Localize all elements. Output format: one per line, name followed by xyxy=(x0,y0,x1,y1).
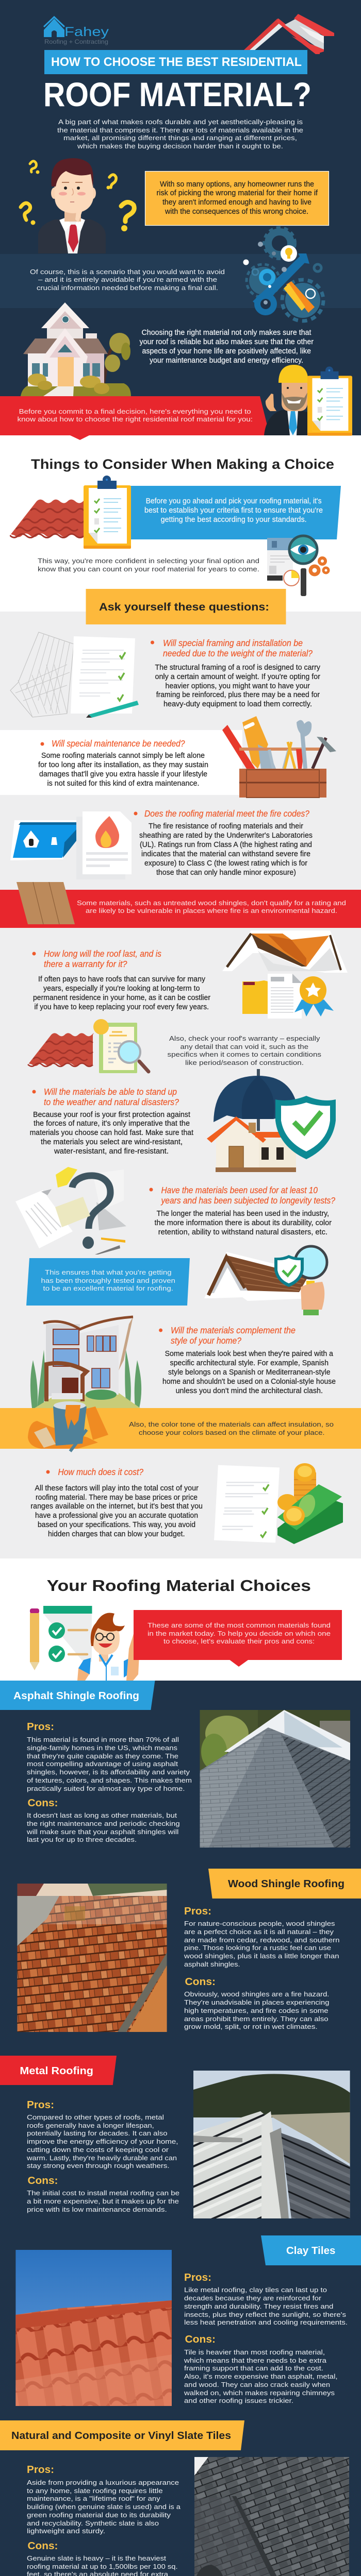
cons text: roofing material at up to 1,500lbs per 100 sq. xyxy=(27,2563,178,2570)
text: confidence xyxy=(38,557,259,573)
logo tagline: Roofing + Contracting xyxy=(44,38,108,45)
panel: establish criteria: best to establish your criteria first to ensure that you're xyxy=(144,506,323,515)
cons text: Tile is heavier than most roofing material, xyxy=(184,2348,325,2356)
icon: roof inspection xyxy=(204,1246,327,1315)
question: roof lifespan: permanent residence in your home, as it can be costlier xyxy=(33,993,210,1002)
pros text: pine. Those looking for a rustic feel can use xyxy=(184,1944,331,1952)
cons text: last you for up to three decades. xyxy=(27,1836,137,1843)
cons text: Also, it's more expensive than asphalt, metal, xyxy=(184,2372,337,2380)
band: color tone note xyxy=(0,1408,361,1449)
question: roof lifespan: If often pays to have roofs that can survive for many xyxy=(38,975,205,984)
cons heading: Cons: xyxy=(185,2334,216,2345)
photo: slate roof xyxy=(194,2457,349,2576)
title: ROOF MATERIAL? xyxy=(43,75,311,113)
pros text: Aside from providing a luxurious appearance xyxy=(27,2479,179,2486)
illustration: gears and tools xyxy=(243,228,323,321)
banner: title line one xyxy=(44,50,307,74)
illustration: confused man xyxy=(38,158,106,253)
pros text: Like metal roofing, clay tiles can last up to xyxy=(184,2286,327,2294)
callout: tested and proven xyxy=(26,1258,190,1306)
icon: folder and award ribbon xyxy=(242,974,334,1019)
pros text xyxy=(27,1736,192,1792)
question: fire codes xyxy=(134,808,313,877)
panel: wood shingle roofing xyxy=(18,1869,361,2032)
band: wood shingle warning: are likely to be vulnerable in places where fire is an environmental hazard. xyxy=(86,907,337,914)
tab: slate heading xyxy=(0,2420,244,2450)
question: home style xyxy=(159,1325,336,1395)
pros text xyxy=(184,1920,339,1968)
cons text: They're unadvisable in places experiencing xyxy=(184,1998,329,2006)
banner: before you commit xyxy=(0,396,270,440)
pros text: single-family homes in the US, which means xyxy=(27,1744,178,1752)
pros text xyxy=(27,2479,181,2535)
icon: document with checks xyxy=(214,1465,280,1543)
pros heading: Pros: xyxy=(27,2464,54,2476)
cons text: It doesn't last as long as other materials, but xyxy=(27,1811,177,1819)
text: avoidable scenario xyxy=(30,268,225,292)
pros text xyxy=(184,2286,348,2326)
banner: before you commit: know about how to choose the right residential roof material for you: xyxy=(18,415,253,423)
question: cost: based on your specifications. This way, you avoid xyxy=(38,1520,195,1529)
icon: paint bucket and roller xyxy=(28,1401,108,1451)
question: special framing: framing be reinforced, plus there may be a need for xyxy=(156,690,320,699)
pros text: asphalt shingles. xyxy=(184,1960,240,1968)
pros text: lightweight and sturdy. xyxy=(27,2527,105,2535)
text: warranty note: any detail that can void it, such as the xyxy=(180,1043,308,1050)
cons text xyxy=(26,1811,180,1843)
intro text: A big part of what makes roofs durable and yet aesthetically-pleasing is xyxy=(58,118,303,126)
question: special framing: only a certain amount of weight. If you're opting for xyxy=(155,672,320,681)
text: avoidable scenario: – and it is entirely avoidable if you're armed with the xyxy=(38,276,217,283)
question: home style: home and shouldn't be used on a Colonial-style house xyxy=(162,1377,336,1386)
icon: red roof tiles xyxy=(10,500,85,538)
callout: common materials xyxy=(134,1610,342,1667)
callout: options: with the consequences of this wrong choice. xyxy=(165,207,308,216)
pros heading: Pros: xyxy=(184,1906,211,1917)
text: avoidable scenario: Of course, this is a scenario that you would want to avoid xyxy=(30,268,225,276)
background: grey questions section xyxy=(0,612,361,1558)
callout: tested and proven: to be an excellent material for roofing. xyxy=(43,1284,173,1292)
cons text: price with its low maintenance demands. xyxy=(27,2206,167,2213)
question: longevity tests: years and has been subjected to longevity tests? xyxy=(161,1195,335,1206)
question: special framing: needed due to the weight of the material? xyxy=(163,648,313,658)
tab: metal heading: Metal Roofing xyxy=(20,2065,93,2077)
question: special framing: The structural framing of a roof is designed to carry xyxy=(155,663,320,672)
question: cost: hidden charges that can blow your budget. xyxy=(48,1530,185,1538)
question: cost xyxy=(30,1467,203,1538)
pros text: decades because they are reinforced for xyxy=(184,2294,322,2302)
text: choosing the right material: Choosing the right material not only makes sure that xyxy=(141,328,311,337)
illustration: house xyxy=(21,302,131,396)
icon: blue roof xyxy=(10,820,77,860)
logo chevron xyxy=(44,17,64,27)
pros text: are a perfect choice as it is all natural – they xyxy=(184,1928,334,1936)
pros text: stay strong even through rough weathers. xyxy=(27,2162,170,2170)
pros text: cutting down the costs of keeping cool or xyxy=(27,2146,169,2154)
question: special framing: Will special framing and installation be xyxy=(163,638,303,648)
icon: money and coins xyxy=(277,1463,343,1544)
photo: metal roof xyxy=(193,2071,350,2218)
text: choosing the right material: your roof is reliable but also makes sure that the other xyxy=(139,337,314,346)
panel: establish criteria: getting the best according to your standards. xyxy=(161,515,307,524)
intro text: which makes the buying decision harder than it ought to be. xyxy=(77,142,283,150)
cons text: The initial cost to install metal roofing can be xyxy=(27,2189,179,2197)
tab: clay heading xyxy=(261,2235,361,2265)
cons heading: Cons: xyxy=(28,2540,58,2552)
question: home style: unless you don't mind the architectural clash. xyxy=(176,1386,323,1395)
question: roof lifespan: How long will the roof last, and is xyxy=(44,948,161,959)
icon: logo house xyxy=(44,19,64,37)
text: avoidable scenario: crucial information needed before making a final call. xyxy=(37,284,218,292)
question: home style: style belongs on a Spanish or Mediterranean-style xyxy=(168,1368,331,1377)
cons text xyxy=(27,2189,179,2213)
panel: maintenance: Some roofing materials cannot simply be left alone xyxy=(41,751,205,760)
cons text: walked on, which makes repairing chimneys xyxy=(184,2389,335,2397)
icon: magnifier with eye xyxy=(267,536,329,596)
callout: tested and proven: This ensures that what you're getting xyxy=(45,1268,172,1276)
question: cost: How much does it cost? xyxy=(58,1467,143,1477)
cons text: a bit more expensive, but it makes up for the xyxy=(27,2197,179,2205)
pros text xyxy=(26,2113,178,2170)
panel: maintenance: damages that'll give you extra hassle if your lifestyle xyxy=(39,770,207,778)
tab: slate heading: Natural and Composite or Vinyl Slate Tiles xyxy=(11,2430,231,2442)
panel: metal roofing xyxy=(0,2056,350,2218)
panel: maintenance: for too long after its installation, as they may sustain xyxy=(38,760,208,769)
heading: things to consider: Things to Consider When Making a Choice xyxy=(31,456,334,472)
pros text: maintenance, is a "lifetime roof" for any xyxy=(27,2495,160,2502)
band: wood shingle warning: Some materials, such as untreated wood shingles, don't qualify for a rating and xyxy=(77,899,346,907)
text: confidence: know that you can count on your roof material for years to come. xyxy=(38,565,259,573)
pros text: strength and durability. They resist fires and xyxy=(184,2302,333,2310)
text: confidence: This way, you're more confident in selecting your final option and xyxy=(38,557,259,565)
band: color tone note: Also, the color tone of the materials can affect insulation, so xyxy=(129,1420,334,1428)
pros text: potentially lasting for decades. It can also xyxy=(27,2129,167,2137)
question: cost: roofing material. There may be base prices or price xyxy=(36,1493,198,1502)
panel: slate tiles xyxy=(0,2420,349,2576)
pros text: For nature-conscious people, wood shingles xyxy=(184,1920,335,1927)
question: weather and disasters: to the weather and natural disasters? xyxy=(44,1097,179,1107)
question: special framing: heavy-duty equipment to load them correctly. xyxy=(163,700,312,708)
question: fire codes: exposure) to Class C (the lowest rating which is for xyxy=(144,859,307,868)
pros text: to any home, slate roofing requires little xyxy=(27,2487,163,2495)
photo: wood shingles xyxy=(18,1884,167,2032)
question: longevity tests: Have the materials been used for at least 10 xyxy=(161,1185,318,1195)
background: navy header xyxy=(0,0,361,435)
cons text: high temperatures, and fire codes in some xyxy=(184,2007,329,2014)
question: roof lifespan: years, especially if you're looking at long-term to xyxy=(43,984,200,993)
background: lighter band xyxy=(0,254,361,308)
pros text: building (when genuine slate is used) and is a xyxy=(27,2503,181,2511)
background: navy materials section xyxy=(0,1681,361,2576)
question: weather and disasters: Will the materials be able to stand up xyxy=(44,1087,177,1097)
question: fire codes: sheathing are rated by the Underwriter's Laboratories xyxy=(139,831,313,840)
pros text: green roofing material due to its durability xyxy=(27,2511,171,2519)
icon: roof tiles with warranty xyxy=(28,1019,149,1073)
cons text: will make sure that your asphalt shingles will xyxy=(26,1828,179,1836)
text: warranty note: specifics when it comes to certain conditions xyxy=(167,1050,322,1058)
question: weather and disasters: the materials you select are wind-resistant, xyxy=(41,1138,183,1146)
panel: establish criteria xyxy=(130,486,341,539)
cons heading: Cons: xyxy=(28,1798,58,1809)
background: white section xyxy=(0,435,361,612)
question: fire codes: indicates that the material can withstand severe fire xyxy=(141,850,310,858)
heading: your roofing material choices: Your Roofing Material Choices xyxy=(47,1577,311,1595)
callout: options: risk of picking the wrong material for their home if xyxy=(157,189,318,197)
icon: checklist clipboard xyxy=(84,476,131,549)
text: warranty note: Also, check your roof's warranty – especially xyxy=(169,1035,320,1042)
text: choosing the right material: aspects of your home life are positively affected, like xyxy=(142,347,311,355)
cons text: Genuine slate is heavy – it is the heaviest xyxy=(27,2554,166,2562)
pros text: less heat penetration and cooling requirements. xyxy=(184,2318,348,2326)
banner: before you commit: Before you commit to a final decision, here's everything you need to xyxy=(19,408,251,415)
callout: options: With so many options, any homeowner runs the xyxy=(160,180,314,189)
pros text: practically suited for almost any type of home. xyxy=(27,1785,185,1792)
pros text: warm. Lastly, they're heavily durable and can xyxy=(26,2154,177,2162)
icon: toolbox xyxy=(222,716,336,798)
question: roof lifespan: there a warranty for it? xyxy=(44,959,127,969)
logo wordmark: Fahey xyxy=(64,25,109,39)
pros text: This material is found in more than 70% of all xyxy=(27,1736,179,1743)
cons text: the right maintenance and periodic checking xyxy=(27,1820,180,1827)
cons text: Obviously, wood shingles are a fire hazard. xyxy=(184,1990,329,1998)
callout: common materials: These are some of the most common materials found xyxy=(147,1621,331,1629)
question: cost: All these factors will play into the total cost of your xyxy=(35,1484,199,1493)
question: special framing xyxy=(151,638,320,708)
question: longevity tests: the more information there is about its durability, color xyxy=(155,1218,332,1227)
panel: asphalt shingle roofing xyxy=(0,1681,350,1848)
question: special framing: heavier options, you might want to have your xyxy=(165,682,310,690)
panel: maintenance: Will special maintenance be needed? xyxy=(52,738,185,749)
cons text: and other roofing issues trickier. xyxy=(184,2397,293,2404)
callout: common materials: in the market today. To help you decide on which one xyxy=(147,1630,331,1637)
pros heading: Pros: xyxy=(27,2099,54,2111)
icon: clipboard xyxy=(307,366,352,436)
text: warranty note xyxy=(167,1035,322,1066)
icon: question mark and documents xyxy=(15,1167,126,1255)
question: fire codes: (UL). Ratings run from Class A (the highest rating and xyxy=(140,840,312,849)
background: white choices intro xyxy=(0,1558,361,1681)
logo xyxy=(44,17,109,45)
pros heading: Pros: xyxy=(27,1721,54,1733)
band: color tone note: choose your colors based on the climate of your place. xyxy=(139,1429,325,1436)
text: choosing the right material xyxy=(139,328,314,365)
band: wood shingle warning xyxy=(0,890,361,928)
pros text: shingles, however, is its affordability and variety xyxy=(27,1768,190,1776)
cons heading: Cons: xyxy=(28,2175,58,2187)
icon: brown and orange roof xyxy=(222,930,348,973)
icon: umbrella house and shield xyxy=(207,1069,336,1172)
pros text: roofs generally have a longer lifespan, xyxy=(27,2122,154,2129)
panel: clay tiles xyxy=(15,2235,361,2406)
panel: maintenance: is not suited for this kind of extra maintenance. xyxy=(47,779,199,788)
cons text: which means that there needs to be extra xyxy=(184,2357,327,2364)
pros text: most compelling advantage of using asphalt xyxy=(27,1760,178,1768)
cons text: areas prohibit them entirely. They can also xyxy=(184,2015,329,2023)
question: home style: style of your home? xyxy=(171,1335,241,1346)
pros text: are made from cedar, redwood, and southern xyxy=(184,1936,339,1944)
intro text: market, all promising different things and ranging at different prices, xyxy=(63,134,297,142)
question: fire codes: those that can only handle minor exposure) xyxy=(156,868,296,877)
question: home style: Some materials look best when they're paired with a xyxy=(165,1349,334,1358)
icon: question marks xyxy=(21,161,134,222)
text: choosing the right material: your maintenance budget and energy efficiency. xyxy=(150,356,303,365)
question: home style: specific architectural style. For example, Spanish xyxy=(170,1359,329,1367)
pros text: and recyclability. Synthetic slate is also xyxy=(27,2519,159,2527)
intro text: the material that comprises it. There are lots of materials available in the xyxy=(57,126,303,134)
photo: clay tiles xyxy=(15,2250,172,2406)
tab: wood heading: Wood Shingle Roofing xyxy=(228,1878,344,1890)
question: cost: ranges available on the internet, but it's best that you xyxy=(30,1502,203,1511)
callout: options: they aren't informed enough and having to live xyxy=(162,198,311,207)
heading: ask yourself xyxy=(86,589,286,624)
question: roof lifespan xyxy=(32,948,210,1011)
pros text: Compared to other types of roofs, metal xyxy=(27,2113,164,2121)
banner: title line one: HOW TO CHOOSE THE BEST RESIDENTIAL xyxy=(51,55,302,69)
panel: establish criteria: Before you go ahead and pick your roofing material, it's xyxy=(146,497,322,505)
cons text: and wood. They can also crack easily when xyxy=(184,2381,330,2388)
intro text xyxy=(57,118,303,150)
icon: wood plank xyxy=(17,882,75,924)
pros heading: Pros: xyxy=(184,2272,211,2283)
tab: asphalt heading xyxy=(0,1681,155,1710)
question mark dots xyxy=(31,170,127,231)
panel: maintenance xyxy=(0,730,242,795)
illustration: builder xyxy=(264,365,308,435)
tab: wood heading xyxy=(208,1869,361,1899)
tab: clay heading: Clay Tiles xyxy=(286,2245,335,2257)
icon: checklist document xyxy=(71,636,139,718)
question: weather and disasters: the forces of nature, it's only imperative that the xyxy=(34,1119,190,1128)
question: longevity tests xyxy=(150,1185,335,1236)
pros text: wood shingles, plus it lasts a little longer than xyxy=(184,1952,339,1960)
cons text xyxy=(184,2348,337,2404)
pros text: improve the energy efficiency of your home, xyxy=(27,2138,178,2145)
question: home style: Will the materials complement the xyxy=(171,1325,296,1335)
question: weather and disasters: materials you choose can hold fast. Make sure that xyxy=(30,1128,194,1137)
tab: metal heading xyxy=(0,2056,117,2085)
illustration: red roof xyxy=(244,14,334,54)
question: cost: have a professional give you an accurate quotation xyxy=(35,1511,198,1520)
callout: options xyxy=(145,171,329,226)
icon: fire document xyxy=(76,811,132,879)
callout: common materials: to choose, let's evaluate their pros and cons: xyxy=(163,1637,315,1645)
pros text: of textures, colors, and shapes. This makes them xyxy=(27,1776,192,1784)
cons text: framing support that can add to the cost. xyxy=(184,2364,323,2372)
illustration: roof frame xyxy=(10,632,74,717)
cons text xyxy=(27,2554,178,2576)
pros text: that they're quite capable as they come. The xyxy=(27,1752,178,1760)
callout: tested and proven: has been thoroughly tested and proven xyxy=(41,1277,175,1284)
question: roof lifespan: if you have to keep replacing your roof every few years. xyxy=(34,1003,209,1011)
heading: ask yourself: Ask yourself these questions: xyxy=(99,601,269,613)
question: fire codes: Does the roofing material meet the fire codes? xyxy=(144,808,309,819)
cons heading: Cons: xyxy=(185,1976,216,1988)
question: weather and disasters: Because your roof is your first protection against xyxy=(33,1110,191,1119)
question: longevity tests: retention, ability to withstand natural disasters, etc. xyxy=(158,1228,327,1236)
tab: asphalt heading: Asphalt Shingle Roofing xyxy=(13,1690,139,1702)
cons text xyxy=(184,1990,329,2030)
question: fire codes: The fire resistance of roofing materials and their xyxy=(149,822,303,831)
icon: modern house xyxy=(30,1317,141,1408)
photo: asphalt shingles xyxy=(200,1710,350,1848)
question: weather and disasters xyxy=(30,1087,194,1156)
question: longevity tests: The longer the material has been used in the industry, xyxy=(157,1209,329,1218)
illustration: woman with checklist xyxy=(30,1606,139,1681)
cons text: grow mold, split, or rot in wet climates. xyxy=(184,2023,318,2030)
pros text: insects, plus they reflect the sunlight, so there's xyxy=(184,2311,347,2318)
question: weather and disasters: water-resistant, and fire-resistant. xyxy=(54,1147,169,1156)
text: warranty note: like period/season of construction. xyxy=(185,1059,304,1066)
